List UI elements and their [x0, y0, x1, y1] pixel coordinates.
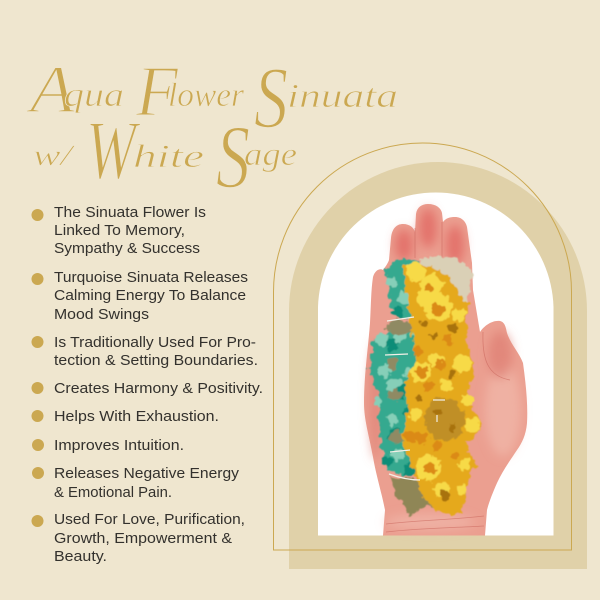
- bullet 6: Improves Intuition.: [54, 438, 184, 454]
- bullet 2: Turquoise Sinuata Releases: [54, 270, 248, 286]
- title: w/: [33, 139, 76, 172]
- dried teal flowers: [368, 259, 424, 476]
- title: F: [135, 51, 179, 131]
- title: W: [86, 104, 141, 197]
- bullet 5: Helps With Exhaustion.: [54, 409, 219, 425]
- illustration: hand holding flower bundle: [364, 204, 527, 536]
- hand: [364, 204, 527, 536]
- arch frame: thin gold outline: [274, 143, 572, 550]
- bullet 3: Is Traditionally Used For Pro-: [54, 335, 256, 351]
- title: S: [254, 50, 288, 147]
- bullet 2: [32, 270, 248, 323]
- sage leaf top: [420, 256, 473, 303]
- twine wraps: [385, 317, 445, 480]
- bullet 8: Beauty.: [54, 549, 107, 565]
- title: age: [244, 137, 297, 173]
- teal bundle brown stems: [386, 320, 414, 443]
- title: hite: [133, 139, 204, 175]
- flower centers: [404, 284, 459, 474]
- golden brown flower center patch: [424, 398, 464, 442]
- bullet 3: tection & Setting Boundaries.: [54, 353, 258, 369]
- bullet 1: Linked To Memory,: [54, 223, 185, 239]
- title: inuata: [287, 78, 398, 115]
- bullet 7: & Emotional Pain.: [54, 485, 172, 501]
- teal flower highlights: [374, 276, 421, 461]
- dried yellow flowers mass: [402, 264, 482, 514]
- bullet 2: Mood Swings: [54, 307, 149, 323]
- bullet 1: The Sinuata Flower Is: [54, 205, 206, 221]
- teal flower shadows: [383, 306, 417, 477]
- bullet 8: Used For Love, Purification,: [54, 512, 245, 528]
- bullet 1: Sympathy & Success: [54, 241, 200, 257]
- bullet 7: [32, 466, 240, 501]
- title: S: [216, 108, 250, 207]
- title: qua: [64, 77, 124, 114]
- title: A: [26, 51, 75, 127]
- bullet 1: [32, 205, 206, 257]
- bullet 8: [32, 512, 245, 565]
- flower bundle: [368, 256, 482, 514]
- yellow flower heads: [406, 262, 480, 498]
- bullet 3: [32, 335, 258, 369]
- bullet 4: Creates Harmony & Positivity.: [54, 381, 263, 397]
- sage base: [390, 476, 466, 514]
- darker flowers: [417, 319, 458, 501]
- bullet 2: Calming Energy To Balance: [54, 288, 246, 304]
- title: [26, 50, 398, 207]
- bullet list: [32, 205, 263, 565]
- hand creases: [386, 222, 510, 532]
- white arch window: [318, 192, 554, 536]
- arch frame: filled tan arch: [289, 162, 587, 569]
- hand shading: [369, 208, 521, 530]
- title: lower: [168, 77, 245, 114]
- bullet 7: Releases Negative Energy: [54, 466, 240, 482]
- bullet 8: Growth, Empowerment &: [54, 531, 232, 547]
